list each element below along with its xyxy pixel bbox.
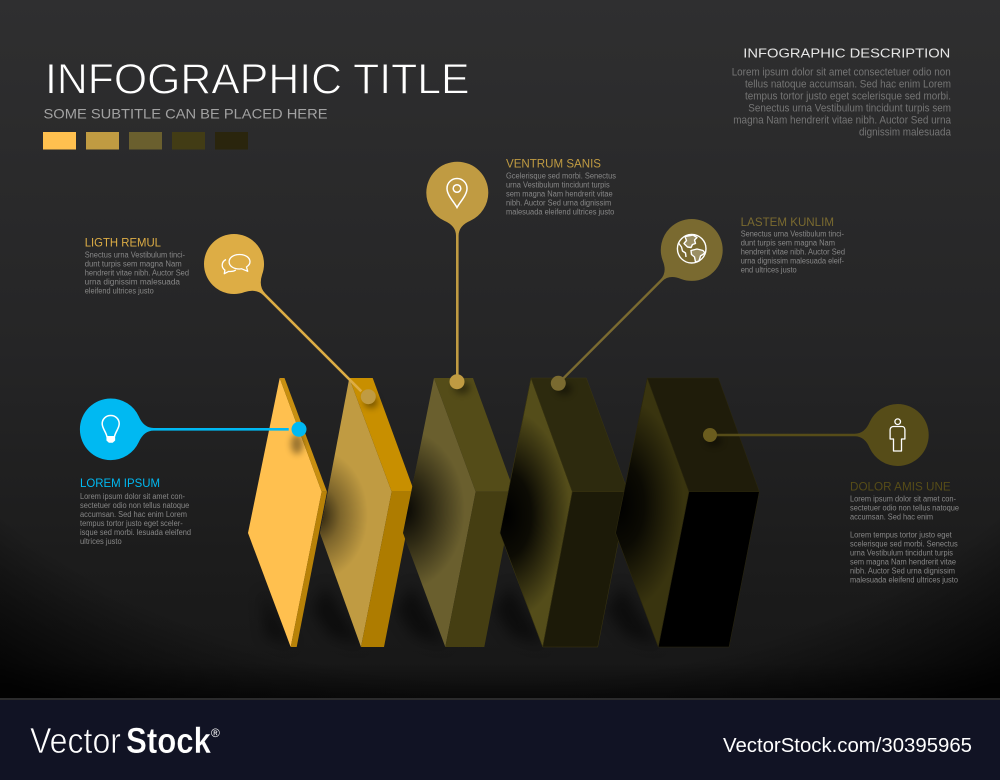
block 5 — [616, 378, 759, 647]
body text: ligth remul: eleifend ultrices justo — [85, 286, 154, 295]
body text: ventrum sanis: malesuada eleifend ultrices justo — [506, 207, 615, 216]
body text: ligth remul: urna dignissim malesuada — [85, 277, 181, 286]
footer logo: Stock — [126, 720, 212, 761]
body text: lorem ipsum: Lorem ipsum dolor sit amet con- — [80, 492, 185, 501]
floor shadows under blocks — [262, 585, 659, 646]
footer bar — [0, 698, 1000, 780]
body text: lastem kunlim: urna dignissim malesuada eleif- — [741, 257, 844, 266]
description text: Lorem ipsum dolor sit amet consectetuer odio non — [732, 66, 951, 78]
block 3 — [403, 378, 514, 647]
body text: lastem kunlim: end ultrices justo — [741, 266, 797, 275]
body text: dolor amis une: malesuada eleifend ultrices justo — [850, 576, 959, 585]
body text: ligth remul — [85, 250, 189, 295]
icon: person — [890, 419, 905, 451]
description text: tempus tortor justo eget scelerisque sed morbi. — [745, 90, 951, 102]
body text: lastem kunlim: dunt turpis sem magna Nam — [741, 239, 835, 248]
pin: person connector — [703, 404, 929, 466]
block 4 — [500, 378, 628, 647]
description text: Senectus urna Vestibulum tincidunt turpis sem — [748, 102, 951, 114]
body text: ligth remul: Snectus urna Vestibulum tinci- — [85, 250, 185, 259]
pin: chat connector — [192, 222, 382, 412]
chart: 3D diamond blocks — [248, 378, 759, 647]
pin: location connector — [426, 162, 488, 389]
body text: lastem kunlim: Senectus urna Vestibulum tinci- — [741, 230, 844, 239]
body text: dolor amis une: nibh. Auctor Sed urna dignissim — [850, 567, 955, 576]
heading: ventrum sanis: VENTRUM SANIS — [506, 158, 601, 170]
body text: lorem ipsum: isque sed morbi. lesuada eleifend — [80, 528, 191, 537]
description text: dignissim malesuada — [859, 126, 951, 138]
body text: lorem ipsum: tempus tortor justo eget sceler- — [80, 519, 183, 528]
panel: dolor amis une — [703, 404, 959, 585]
block 2 — [320, 378, 414, 647]
icon: map pin — [447, 178, 467, 208]
title: INFOGRAPHIC TITLE — [45, 56, 470, 104]
body text: dolor amis une: sectetuer odio non tellus natoque — [850, 504, 959, 513]
subtitle: SOME SUBTITLE CAN BE PLACED HERE — [44, 105, 328, 121]
body text: ventrum sanis: Gcelerisque sed morbi. Senectus — [506, 171, 616, 180]
pin: lightbulb connector — [80, 398, 306, 460]
body text: ventrum sanis: sem magna Nam hendrerit vitae — [506, 189, 613, 198]
body text: ventrum sanis: nibh. Auctor Sed urna dignissim — [506, 198, 612, 207]
dot shadows — [291, 382, 722, 454]
block 1 — [248, 378, 327, 647]
footer image id: VectorStock.com/30395965 — [723, 735, 972, 757]
pin: globe connector — [537, 206, 736, 405]
heading: dolor amis une: DOLOR AMIS UNE — [850, 482, 951, 494]
description text: tellus natoque accumsan. Sed hac enim Lorem — [745, 78, 951, 90]
body text: lorem ipsum: sectetuer odio non tellus natoque — [80, 501, 190, 510]
body text: dolor amis une — [850, 495, 959, 585]
body text: lastem kunlim — [741, 230, 845, 275]
body text: dolor amis une: accumsan. Sed hac enim — [850, 513, 933, 522]
body text: lorem ipsum: accumsan. Sed hac enim Lorem — [80, 510, 187, 519]
body text: dolor amis une: urna Vestibulum tincidunt turpis — [850, 549, 953, 558]
heading: lastem kunlim: LASTEM KUNLIM — [741, 217, 834, 229]
body text: ligth remul: hendrerit vitae nibh. Auctor Sed — [85, 268, 189, 277]
footer logo: ® — [211, 726, 220, 740]
body text: ventrum sanis: urna Vestibulum tincidunt turpis — [506, 180, 610, 189]
icon: globe — [677, 234, 706, 263]
icon: lightbulb — [102, 416, 119, 442]
colour legend swatches — [43, 132, 248, 150]
panel: ventrum sanis — [426, 158, 616, 389]
footer logo: Vector — [30, 720, 121, 761]
description block — [732, 45, 951, 138]
body text: lorem ipsum: ultrices justo — [80, 537, 122, 546]
body text: lorem ipsum — [80, 492, 191, 546]
panel: ligth remul — [85, 222, 382, 412]
heading: lorem ipsum: LOREM IPSUM — [80, 478, 160, 490]
heading: ligth remul: LIGTH REMUL — [85, 238, 162, 250]
panel: lorem ipsum — [80, 398, 306, 546]
body text: ligth remul: dunt turpis sem magna Nam — [85, 259, 182, 268]
description text: magna Nam hendrerit vitae nibh. Auctor Sed urna — [733, 114, 951, 126]
body text: dolor amis une: sem magna Nam hendrerit vitae — [850, 558, 957, 567]
panel: lastem kunlim — [537, 206, 845, 405]
body text: lastem kunlim: hendrerit vitae nibh. Auctor Sed — [741, 248, 845, 257]
description heading: INFOGRAPHIC DESCRIPTION — [743, 45, 950, 60]
description text — [732, 66, 951, 138]
footer logo — [30, 720, 220, 761]
body text: ventrum sanis — [506, 171, 616, 216]
body text: dolor amis une: Lorem ipsum dolor sit amet con- — [850, 495, 956, 504]
body text: dolor amis une: scelerisque sed morbi. Senectus — [850, 540, 958, 549]
body text: dolor amis une: Lorem tempus tortor justo eget — [850, 531, 952, 540]
icon: chat bubbles — [222, 254, 250, 274]
